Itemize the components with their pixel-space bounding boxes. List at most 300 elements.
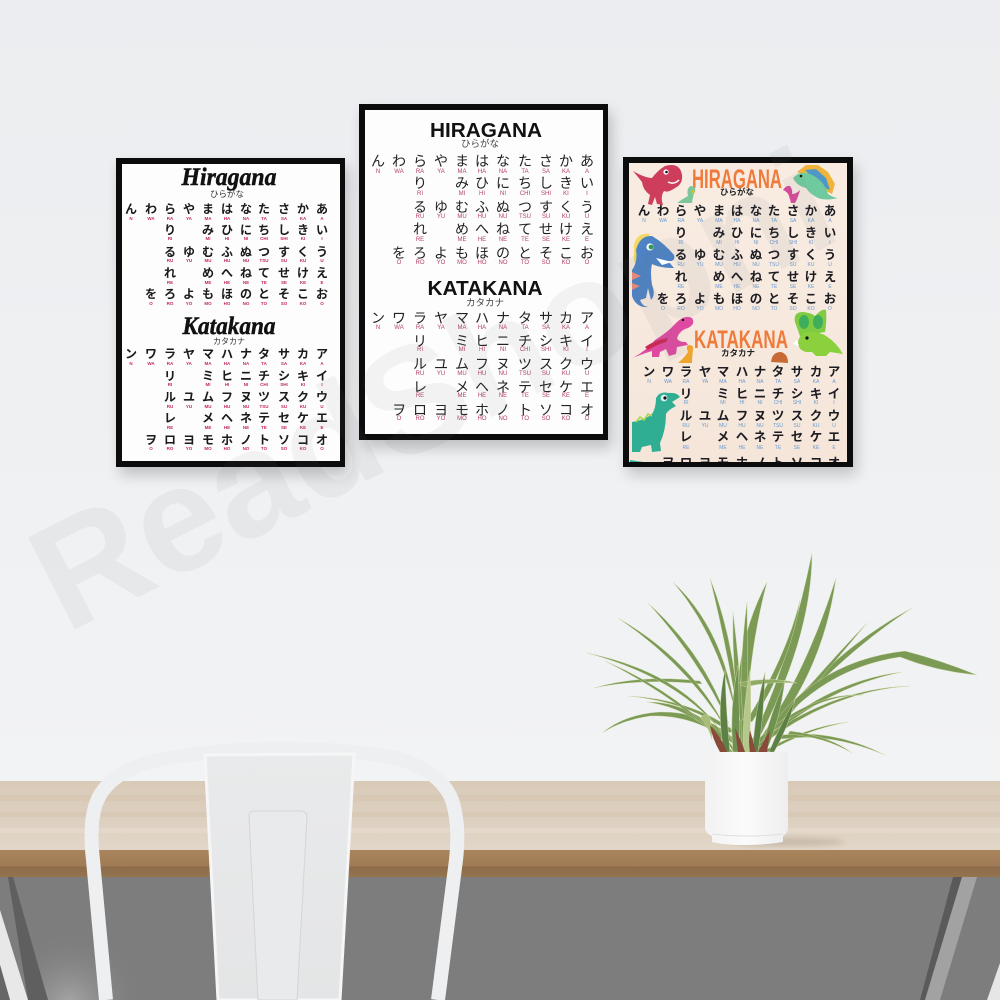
chair bbox=[92, 749, 457, 1000]
wall background bbox=[0, 0, 1000, 782]
katakana chart: I bbox=[321, 382, 323, 387]
hiragana chart: YA bbox=[186, 216, 193, 221]
katakana chart: RA bbox=[167, 361, 174, 366]
katakana chart: SHI bbox=[280, 382, 288, 387]
icon: blue raptor bbox=[632, 234, 674, 307]
hiragana chart: MO bbox=[715, 306, 723, 312]
hiragana chart: KA bbox=[300, 216, 307, 221]
hiragana chart: TE bbox=[261, 280, 267, 285]
katakana chart: KI bbox=[563, 347, 569, 353]
katakana chart: O bbox=[585, 416, 590, 422]
katakana chart: リミヒニチシキイ bbox=[164, 369, 328, 383]
hiragana chart: MA bbox=[715, 218, 723, 224]
katakana chart: MI bbox=[206, 382, 210, 387]
hiragana chart: TA bbox=[261, 216, 268, 221]
chair back inset bbox=[249, 811, 307, 1000]
hiragana chart: MI bbox=[716, 240, 722, 246]
katakana chart: TSU bbox=[519, 371, 531, 377]
hiragana chart: RE bbox=[678, 284, 685, 290]
hiragana chart: りみひにちしきい bbox=[164, 223, 328, 237]
hiragana chart: をろよもほのとそこお bbox=[392, 245, 594, 261]
katakana chart: ルユムフヌツスクウ bbox=[680, 409, 840, 423]
hiragana chart: YU bbox=[437, 214, 445, 220]
hiragana chart bbox=[371, 153, 594, 266]
hiragana chart: KE bbox=[300, 280, 306, 285]
katakana chart: NO bbox=[498, 416, 508, 422]
heading: Katakana script: Katakana bbox=[182, 313, 276, 340]
hiragana chart: SHI bbox=[280, 236, 288, 241]
hiragana chart: E bbox=[585, 237, 589, 243]
hiragana chart: SA bbox=[790, 218, 797, 224]
katakana chart bbox=[125, 347, 328, 451]
katakana chart: MU bbox=[719, 423, 727, 429]
hiragana chart: NI bbox=[754, 240, 758, 246]
plant in white pot bbox=[587, 553, 977, 846]
katakana chart: E bbox=[585, 393, 589, 399]
katakana chart: SE bbox=[281, 425, 287, 430]
hiragana chart: NU bbox=[499, 214, 507, 220]
katakana chart: NE bbox=[757, 445, 764, 451]
hiragana chart: O bbox=[149, 301, 153, 306]
katakana chart: HE bbox=[224, 425, 230, 430]
katakana chart: TSU bbox=[260, 404, 268, 409]
hiragana chart: HA bbox=[224, 216, 231, 221]
hiragana chart: KU bbox=[562, 214, 570, 220]
hiragana chart: O bbox=[320, 301, 324, 306]
hiragana chart: KI bbox=[301, 236, 305, 241]
hiragana chart: RU bbox=[677, 262, 685, 268]
subheading: katakana: カタカナ bbox=[213, 337, 245, 346]
katakana chart: HA bbox=[224, 361, 231, 366]
katakana chart: RE bbox=[167, 425, 173, 430]
hiragana chart: TE bbox=[521, 237, 529, 243]
katakana chart: A bbox=[320, 361, 324, 366]
hiragana chart: WA bbox=[659, 218, 668, 224]
hiragana chart: HE bbox=[734, 284, 741, 290]
hiragana chart: I bbox=[829, 240, 831, 246]
katakana chart: N bbox=[129, 361, 133, 366]
katakana chart: NE bbox=[243, 425, 249, 430]
katakana chart: ンワラヤマハナタサカア bbox=[125, 347, 328, 361]
katakana chart: NU bbox=[756, 423, 764, 429]
katakana chart: I bbox=[833, 400, 835, 406]
katakana chart: YO bbox=[437, 416, 446, 422]
hiragana chart: O bbox=[585, 260, 590, 266]
katakana chart: MA bbox=[458, 325, 466, 331]
katakana chart: RE bbox=[416, 393, 424, 399]
katakana chart: HE bbox=[739, 445, 746, 451]
katakana chart: MO bbox=[204, 446, 212, 451]
hiragana chart: りみひにちしきい bbox=[675, 226, 836, 240]
hiragana chart: RA bbox=[167, 216, 174, 221]
hiragana chart: HU bbox=[733, 262, 741, 268]
katakana chart: ME bbox=[458, 393, 466, 399]
katakana chart: E bbox=[832, 445, 836, 451]
heading: HIRAGANA orange: HIRAGANA bbox=[692, 164, 782, 194]
icon: small green dinosaur bbox=[677, 186, 696, 203]
hiragana chart: KU bbox=[808, 262, 815, 268]
katakana chart: SU bbox=[794, 423, 801, 429]
hiragana chart: YO bbox=[437, 260, 446, 266]
hiragana chart: KI bbox=[563, 191, 569, 197]
hiragana chart: SO bbox=[281, 301, 288, 306]
katakana chart: HA bbox=[739, 379, 746, 385]
katakana chart: RI bbox=[168, 382, 172, 387]
hiragana chart: TA bbox=[771, 218, 778, 224]
katakana chart: KA bbox=[300, 361, 307, 366]
hiragana chart: NE bbox=[753, 284, 760, 290]
hiragana chart: TSU bbox=[769, 262, 779, 268]
hiragana chart: KA bbox=[562, 169, 570, 175]
hiragana chart: SA bbox=[542, 169, 550, 175]
hiragana chart: RA bbox=[678, 218, 685, 224]
katakana chart: NI bbox=[244, 382, 248, 387]
katakana chart: SE bbox=[542, 393, 550, 399]
table bbox=[0, 781, 1000, 1000]
hiragana chart: U bbox=[320, 258, 324, 263]
hiragana chart: をろよもほのとそこお bbox=[145, 287, 328, 301]
hiragana chart: HI bbox=[479, 191, 485, 197]
hiragana chart: MO bbox=[457, 260, 467, 266]
plant leaves bbox=[587, 553, 977, 755]
hiragana chart: MI bbox=[459, 191, 466, 197]
hiragana chart: CHI bbox=[770, 240, 778, 246]
hiragana chart: MU bbox=[204, 258, 212, 263]
katakana chart: リミヒニチシキイ bbox=[413, 333, 594, 349]
poster: clean hiragana and katakana bbox=[359, 104, 612, 448]
katakana chart: HU bbox=[224, 404, 230, 409]
hiragana chart: TO bbox=[261, 301, 268, 306]
hiragana chart: れめへねてせけえ bbox=[675, 270, 836, 284]
hiragana chart: れめへねてせけえ bbox=[413, 221, 594, 237]
heading: Hiragana script: Hiragana bbox=[181, 164, 276, 191]
katakana chart: YU bbox=[702, 423, 709, 429]
hiragana chart: NA bbox=[499, 169, 507, 175]
hiragana chart: YU bbox=[697, 262, 704, 268]
katakana chart: HO bbox=[224, 446, 231, 451]
heading: HIRAGANA: HIRAGANA bbox=[430, 120, 542, 142]
hiragana chart bbox=[125, 202, 328, 306]
hiragana chart: RO bbox=[416, 260, 425, 266]
white pot bbox=[705, 752, 788, 845]
hiragana chart: SO bbox=[542, 260, 551, 266]
katakana chart: TSU bbox=[773, 423, 783, 429]
chair back panel bbox=[205, 754, 354, 1000]
hiragana chart: RA bbox=[416, 169, 424, 175]
katakana chart: TA bbox=[521, 325, 529, 331]
katakana chart: KI bbox=[301, 382, 305, 387]
hiragana chart: NI bbox=[244, 236, 248, 241]
katakana chart: YA bbox=[186, 361, 193, 366]
katakana chart: NO bbox=[243, 446, 250, 451]
hiragana chart: U bbox=[828, 262, 832, 268]
hiragana chart: YO bbox=[696, 306, 704, 312]
katakana chart: レメヘネテセケエ bbox=[680, 430, 840, 444]
hiragana chart: E bbox=[828, 284, 832, 290]
poster: script hiragana and katakana bbox=[116, 158, 349, 475]
hiragana chart: RU bbox=[416, 214, 424, 220]
hiragana chart: YA bbox=[697, 218, 704, 224]
katakana chart: NU bbox=[499, 371, 507, 377]
katakana chart: MU bbox=[204, 404, 212, 409]
katakana chart: YA bbox=[702, 379, 709, 385]
hiragana chart: TO bbox=[771, 306, 778, 312]
hiragana chart: TSU bbox=[260, 258, 268, 263]
katakana chart: ME bbox=[719, 445, 727, 451]
katakana chart: KU bbox=[813, 423, 820, 429]
katakana chart: TE bbox=[521, 393, 529, 399]
katakana chart: HE bbox=[478, 393, 486, 399]
katakana chart: KE bbox=[562, 393, 570, 399]
hiragana chart: N bbox=[129, 216, 133, 221]
hiragana chart: ME bbox=[715, 284, 723, 290]
katakana chart: TO bbox=[521, 416, 529, 422]
hiragana chart: MU bbox=[715, 262, 723, 268]
subheading: hiragana: ひらがな bbox=[461, 138, 499, 150]
hiragana chart: HO bbox=[478, 260, 487, 266]
subheading: hiragana: ひらがな bbox=[720, 187, 754, 197]
hiragana chart: E bbox=[320, 280, 324, 285]
hiragana chart: KE bbox=[808, 284, 815, 290]
hiragana chart: HU bbox=[478, 214, 486, 220]
hiragana chart: るゆむふぬつすくう bbox=[164, 245, 328, 259]
katakana chart: E bbox=[320, 425, 324, 430]
hiragana chart: KE bbox=[562, 237, 570, 243]
hiragana chart: I bbox=[321, 236, 323, 241]
hiragana chart: TA bbox=[521, 169, 529, 175]
katakana chart: SU bbox=[542, 371, 550, 377]
hiragana chart: SA bbox=[281, 216, 288, 221]
katakana chart: U bbox=[320, 404, 324, 409]
icon: red t-rex bbox=[633, 165, 682, 205]
hiragana chart: HI bbox=[734, 240, 740, 246]
katakana chart: TE bbox=[775, 445, 782, 451]
hiragana chart: N bbox=[642, 218, 646, 224]
katakana chart: SO bbox=[281, 446, 288, 451]
katakana chart: HI bbox=[225, 382, 229, 387]
katakana chart: ンワラヤマハナタサカア bbox=[643, 365, 840, 379]
hiragana chart: ME bbox=[458, 237, 466, 243]
katakana chart: TA bbox=[775, 379, 782, 385]
katakana chart: NE bbox=[499, 393, 507, 399]
katakana chart: HO bbox=[478, 416, 487, 422]
katakana chart: MI bbox=[459, 347, 466, 353]
icon: pink long-neck dinosaur bbox=[632, 317, 693, 358]
katakana chart: RU bbox=[682, 423, 690, 429]
hiragana chart: NE bbox=[499, 237, 507, 243]
katakana chart: ルユムフヌツスクウ bbox=[413, 356, 594, 372]
hiragana chart: MA bbox=[458, 169, 466, 175]
katakana chart: HU bbox=[738, 423, 746, 429]
katakana chart: HI bbox=[740, 400, 744, 406]
hiragana chart bbox=[638, 204, 837, 312]
katakana chart: レメヘネテセケエ bbox=[164, 411, 328, 425]
hiragana chart: RO bbox=[167, 301, 174, 306]
katakana chart: SU bbox=[281, 404, 287, 409]
katakana chart: TO bbox=[261, 446, 268, 451]
hiragana chart: SE bbox=[790, 284, 797, 290]
hiragana chart: んわらやまはなたさかあ bbox=[638, 204, 836, 218]
katakana chart: YU bbox=[437, 371, 445, 377]
subheading: hiragana: ひらがな bbox=[210, 189, 244, 199]
hiragana chart: N bbox=[376, 169, 380, 175]
katakana chart: YU bbox=[186, 404, 192, 409]
katakana chart: RU bbox=[167, 404, 173, 409]
hiragana chart: I bbox=[586, 191, 588, 197]
hiragana chart: NA bbox=[753, 218, 760, 224]
hiragana chart: NU bbox=[243, 258, 249, 263]
katakana chart: U bbox=[585, 371, 589, 377]
hiragana chart: YO bbox=[186, 301, 193, 306]
hiragana chart: TO bbox=[521, 260, 529, 266]
hiragana chart: NO bbox=[752, 306, 760, 312]
katakana chart: NA bbox=[757, 379, 764, 385]
hiragana chart: HO bbox=[224, 301, 231, 306]
katakana chart: SE bbox=[794, 445, 801, 451]
katakana chart bbox=[371, 310, 594, 422]
hiragana chart: NO bbox=[243, 301, 250, 306]
subheading: katakana: カタカナ bbox=[721, 348, 755, 358]
hiragana chart: RE bbox=[167, 280, 173, 285]
icon: small orange dinosaur bbox=[678, 345, 693, 363]
hiragana chart: KU bbox=[300, 258, 306, 263]
katakana chart: KU bbox=[562, 371, 570, 377]
katakana chart: U bbox=[832, 423, 836, 429]
katakana chart: YO bbox=[186, 446, 193, 451]
icon: stegosaurus bbox=[793, 165, 838, 200]
hiragana chart: KI bbox=[809, 240, 813, 246]
hiragana chart: SHI bbox=[789, 240, 797, 246]
katakana chart: ヲロヨモホノトソコオ bbox=[392, 402, 594, 418]
katakana chart: O bbox=[397, 416, 402, 422]
katakana chart: A bbox=[832, 379, 836, 385]
hiragana chart: んわらやまはなたさかあ bbox=[125, 202, 328, 216]
hiragana chart: NI bbox=[500, 191, 506, 197]
hiragana chart: WA bbox=[147, 216, 155, 221]
icon: armadillo bbox=[771, 352, 788, 363]
katakana chart: N bbox=[376, 325, 380, 331]
hiragana chart: MA bbox=[204, 216, 212, 221]
katakana chart: リミヒニチシキイ bbox=[680, 387, 840, 401]
hiragana chart: TSU bbox=[519, 214, 531, 220]
hiragana chart: SHI bbox=[541, 191, 551, 197]
katakana chart: ルユムフヌツスクウ bbox=[164, 390, 328, 404]
hiragana chart: ME bbox=[205, 280, 211, 285]
katakana chart: WA bbox=[664, 379, 673, 385]
hiragana chart: HI bbox=[225, 236, 229, 241]
katakana chart bbox=[643, 365, 840, 470]
hiragana chart: HU bbox=[224, 258, 230, 263]
hiragana chart: HA bbox=[734, 218, 741, 224]
hiragana chart: SE bbox=[281, 280, 287, 285]
hiragana chart: TE bbox=[771, 284, 778, 290]
katakana chart: MU bbox=[457, 371, 467, 377]
katakana chart: KA bbox=[813, 379, 820, 385]
icon: teal dinosaur bbox=[630, 393, 680, 465]
katakana chart: KA bbox=[562, 325, 570, 331]
katakana chart: KI bbox=[814, 400, 818, 406]
hiragana chart: SU bbox=[281, 258, 287, 263]
katakana chart: ンワラヤマハナタサカア bbox=[371, 310, 594, 326]
hiragana chart: るゆむふぬつすくう bbox=[675, 248, 836, 262]
katakana chart: CHI bbox=[520, 347, 530, 353]
hiragana chart: KO bbox=[300, 301, 307, 306]
katakana chart: ヲロヨモホノトソコオ bbox=[662, 456, 840, 470]
hiragana chart: CHI bbox=[520, 191, 530, 197]
katakana chart: HI bbox=[479, 347, 485, 353]
katakana chart: MA bbox=[204, 361, 212, 366]
hiragana chart: れめへねてせけえ bbox=[164, 266, 328, 280]
heading: KATAKANA orange: KATAKANA bbox=[694, 326, 788, 354]
hiragana chart: SO bbox=[789, 306, 797, 312]
hiragana chart: HO bbox=[733, 306, 741, 312]
katakana chart: KE bbox=[813, 445, 820, 451]
hiragana chart: YA bbox=[437, 169, 445, 175]
katakana chart: ME bbox=[205, 425, 211, 430]
hiragana chart: SU bbox=[790, 262, 797, 268]
hiragana chart: A bbox=[828, 218, 832, 224]
hiragana chart: RI bbox=[417, 191, 423, 197]
hiragana chart: NU bbox=[752, 262, 760, 268]
hiragana chart: るゆむふぬつすくう bbox=[413, 199, 594, 215]
katakana chart: ヲロヨモホノトソコオ bbox=[145, 433, 328, 447]
hiragana chart: りみひにちしきい bbox=[413, 175, 594, 191]
katakana chart: SA bbox=[542, 325, 550, 331]
hiragana chart: MU bbox=[457, 214, 467, 220]
katakana chart: RE bbox=[683, 445, 690, 451]
katakana chart: RI bbox=[417, 347, 423, 353]
katakana chart: SA bbox=[794, 379, 801, 385]
katakana chart: SHI bbox=[541, 347, 551, 353]
katakana chart: SO bbox=[542, 416, 551, 422]
katakana chart: HU bbox=[478, 371, 486, 377]
hiragana chart: RI bbox=[678, 240, 684, 246]
watermark: ReadShopni bbox=[4, 116, 860, 663]
hiragana chart: A bbox=[320, 216, 324, 221]
reddish leaf bases bbox=[710, 725, 770, 752]
hiragana chart: SU bbox=[542, 214, 550, 220]
katakana chart: TE bbox=[261, 425, 267, 430]
katakana chart: RA bbox=[416, 325, 424, 331]
katakana chart: O bbox=[149, 446, 153, 451]
katakana chart: RO bbox=[167, 446, 174, 451]
icon: green triceratops bbox=[793, 310, 843, 356]
hiragana chart: RE bbox=[416, 237, 424, 243]
hiragana chart: KO bbox=[562, 260, 571, 266]
hiragana chart: HA bbox=[478, 169, 486, 175]
katakana chart: NA bbox=[243, 361, 250, 366]
katakana chart: MO bbox=[457, 416, 467, 422]
hiragana chart: NO bbox=[498, 260, 508, 266]
katakana chart: N bbox=[647, 379, 651, 385]
icon: small pink dinosaur bbox=[783, 186, 800, 203]
katakana chart: CHI bbox=[774, 400, 782, 406]
hiragana chart: WA bbox=[394, 169, 404, 175]
hiragana chart: をろよもほのとそこお bbox=[657, 292, 837, 306]
katakana chart: YA bbox=[437, 325, 445, 331]
hiragana chart: U bbox=[585, 214, 589, 220]
hiragana chart: HE bbox=[224, 280, 230, 285]
hiragana chart: O bbox=[661, 306, 665, 312]
katakana chart: RI bbox=[684, 400, 688, 406]
katakana chart: RA bbox=[683, 379, 690, 385]
hiragana chart: A bbox=[585, 169, 589, 175]
katakana chart: MA bbox=[719, 379, 727, 385]
katakana chart: KO bbox=[562, 416, 571, 422]
katakana chart: I bbox=[586, 347, 588, 353]
hiragana chart: O bbox=[828, 306, 832, 312]
katakana chart: NA bbox=[499, 325, 507, 331]
